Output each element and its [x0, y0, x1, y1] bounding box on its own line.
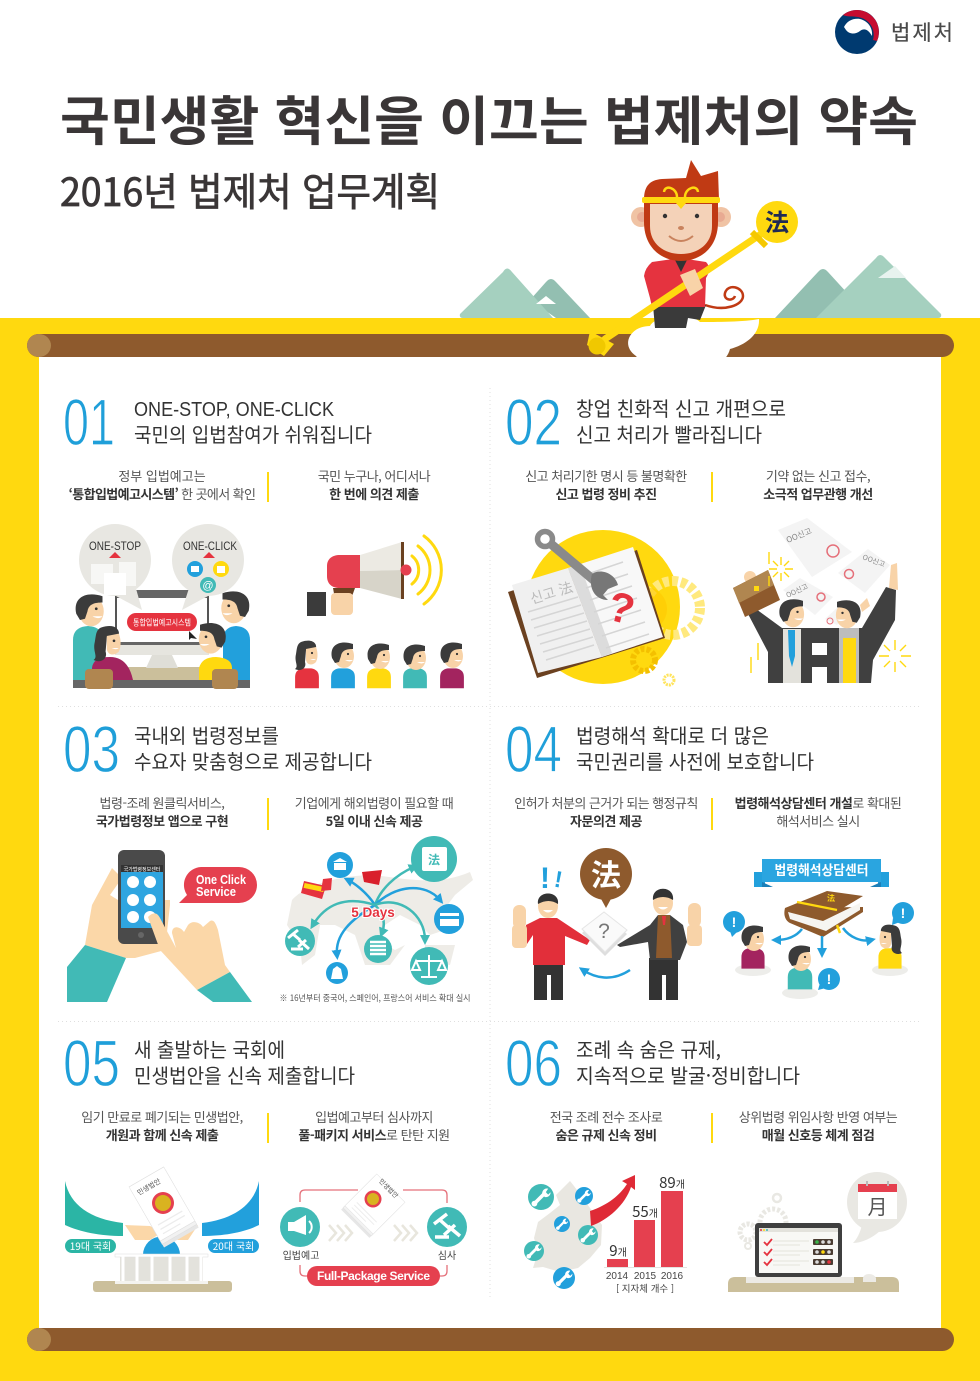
illustration: one-stop one-click [73, 524, 250, 689]
bar chart: 9개 [609, 1240, 627, 1261]
heading 04 [576, 720, 814, 775]
heading 01: ONE-STOP, ONE-CLICK [134, 399, 335, 421]
torso [644, 258, 709, 307]
law bubble: 法 [591, 851, 621, 895]
assembly building [93, 1237, 232, 1292]
hand [860, 563, 898, 612]
icon: gavel [285, 926, 315, 956]
text: right point [295, 793, 453, 830]
audience [295, 641, 464, 688]
text: left point [514, 793, 698, 830]
icon: law book [411, 836, 457, 882]
bar chart: [ 지자체 개수 ] [616, 1281, 674, 1295]
citizen [512, 894, 590, 1000]
exclamation marks [540, 862, 564, 895]
bar chart: 2016 [661, 1271, 684, 1282]
speech bubble: One Click [196, 873, 246, 887]
number 02: 02 [505, 385, 562, 459]
label: 19대 국회: 19대 국회 [70, 1238, 111, 1253]
gears [740, 1194, 786, 1249]
staff head [756, 201, 798, 243]
illustration: interpretation centre [723, 859, 914, 999]
legs [653, 305, 706, 328]
bubble: one-stop [79, 524, 151, 610]
text: right point [735, 793, 901, 830]
text: right point: 기약 없는 신고 접수, [766, 466, 870, 485]
text: left point [69, 466, 255, 503]
button [127, 613, 197, 640]
connector line [300, 1190, 447, 1276]
text: left point: 개원과 함께 신속 제출 [106, 1125, 219, 1144]
documents: OO신고 [785, 526, 813, 546]
heading 01: 국민의 입법참여가 쉬워집니다 [134, 419, 372, 448]
arrows [313, 867, 440, 955]
divider [267, 472, 269, 502]
heading 04: 국민권리를 사전에 보호합니다 [576, 746, 814, 775]
icon: card [434, 904, 464, 934]
speech bubble: Service [196, 885, 236, 899]
service pill: Full-Package Service [317, 1269, 430, 1283]
divider [711, 1113, 713, 1143]
question document [582, 912, 627, 956]
monkey character with staff on a cloud [587, 160, 798, 369]
panel 03 [63, 712, 473, 1004]
sleeve: teal [65, 1181, 123, 1236]
illustration: businessmen with papers [733, 518, 911, 683]
book: 신고 法 [528, 577, 575, 609]
yellow frame [0, 318, 980, 1381]
illustration: local regulation map and chart [524, 1172, 687, 1295]
number 06: 06 [505, 1026, 562, 1100]
official [617, 889, 702, 1000]
text: left point: 인허가 처분의 근거가 되는 행정규칙 [514, 793, 698, 812]
heading 03: 국내외 법령정보를 [134, 720, 279, 749]
staff head: 法 [765, 203, 789, 238]
law bubble [580, 848, 632, 908]
text: left point [81, 1107, 243, 1144]
logo: 법제처 [835, 10, 953, 54]
number 04: 04 [505, 712, 562, 786]
bottom wooden bar [27, 1328, 954, 1351]
text: right point: 입법예고부터 심사까지 [315, 1107, 433, 1126]
heading 02: 창업 친화적 신고 개편으로 [576, 393, 786, 422]
person: teal: ! [827, 971, 831, 987]
bubble: one-stop: ONE-STOP [89, 539, 141, 553]
text: left point: 국가법령정보 앱으로 구현 [96, 811, 228, 830]
book [508, 547, 665, 678]
bubble: one-click: ONE-CLICK [183, 539, 237, 553]
divider [267, 1113, 269, 1143]
person: yellow: ! [901, 905, 905, 921]
bar chart: 55개 [632, 1201, 658, 1222]
heading 06: 조례 속 숨은 규제, [576, 1034, 721, 1063]
monitor [115, 590, 209, 668]
hands [125, 1225, 198, 1240]
heading 04: 법령해석 확대로 더 많은 [576, 720, 769, 749]
person: plum [723, 911, 771, 976]
document stack: 민생법안 [377, 1176, 401, 1200]
document stack [129, 1167, 199, 1248]
divider [267, 798, 269, 830]
bubble: one-click [172, 524, 244, 610]
text: left point: 전국 조례 전수 조사로 [550, 1107, 663, 1126]
phone: 국가법령정보센터 [124, 866, 160, 873]
book [784, 891, 863, 937]
text: left point: 정부 입법예고는 [118, 466, 206, 485]
service pill [307, 1266, 440, 1286]
book: 法 [827, 893, 835, 904]
text: left point: 신고 법령 정비 추진 [555, 484, 657, 503]
heads [779, 599, 861, 628]
documents [778, 518, 890, 625]
divider [711, 798, 713, 830]
bar chart: 2014 [606, 1271, 629, 1282]
number 03: 03 [63, 712, 120, 786]
illustration: citizen and official [512, 848, 702, 1000]
icon: law book: 法 [428, 851, 440, 868]
sleeve: blue [202, 1181, 259, 1236]
heading 01 [134, 399, 372, 448]
text: left point: 숨은 규제 신속 정비 [555, 1125, 657, 1144]
question document: ? [598, 920, 610, 943]
phone [118, 850, 165, 944]
ears [631, 207, 731, 227]
text: left point [550, 1107, 663, 1144]
tail [705, 287, 743, 308]
divider [711, 472, 713, 502]
bar chart: 2015 [634, 1271, 657, 1282]
text: left point: 법령-조례 원클릭서비스, [100, 793, 224, 812]
headband [642, 188, 720, 209]
note: ※ 16년부터 중국어, 스페인어, 프랑스어 서비스 확대 실시 [280, 992, 470, 1004]
flags [301, 870, 382, 899]
laptop [755, 1223, 842, 1277]
banner: 법령해석상담센터 [774, 859, 868, 879]
panel 01 [63, 385, 464, 689]
illustration: laptop and calendar [728, 1172, 907, 1292]
labels [283, 1247, 456, 1262]
panel 04 [505, 712, 914, 1000]
heading 05: 민생법안을 신속 제출합니다 [134, 1060, 355, 1089]
bar chart [604, 1172, 687, 1295]
icon: court [327, 852, 353, 878]
icon: scales [410, 947, 448, 985]
heading 05: 새 출발하는 국회에 [134, 1034, 285, 1063]
text: right point: 국민 누구나, 어디서나 [318, 466, 431, 485]
person: yellow [872, 902, 914, 976]
icon: documents [364, 935, 392, 963]
text: left point [96, 793, 228, 830]
question mark: ? [603, 582, 640, 634]
illustration: phone in hands [67, 850, 257, 1002]
text: left point: 임기 만료로 폐기되는 민생법안, [81, 1107, 243, 1126]
top wooden bar [27, 334, 954, 357]
number 01: 01 [63, 385, 115, 459]
right hand and sleeve [148, 913, 252, 1002]
banner [754, 859, 889, 887]
sparkles [751, 552, 911, 673]
text: left point: 신고 처리기한 명시 등 불명확한 [525, 466, 687, 485]
wrench icons [524, 1184, 598, 1289]
illustration: megaphone with audience [295, 536, 464, 688]
mountains right [775, 255, 941, 318]
text: right point: 풀-패키지 서비스로 탄탄 지원 [298, 1125, 450, 1144]
text: right point [318, 466, 431, 503]
megaphone [307, 536, 441, 616]
label: 20대 국회: 20대 국회 [213, 1238, 254, 1253]
text: right point: 상위법령 위임사항 반영 여부는 [739, 1107, 898, 1126]
desk [728, 1274, 899, 1292]
icon: gavel [427, 1207, 467, 1247]
documents: OO신고 [784, 582, 810, 601]
panel 05 [63, 1026, 467, 1292]
heading 03 [134, 720, 372, 775]
bar chart: 89개 [659, 1172, 685, 1193]
suits [747, 587, 896, 683]
panel 02 [505, 385, 911, 685]
text: left point [525, 466, 687, 503]
text: right point: 법령해석상담센터 개설로 확대된 [735, 793, 901, 812]
heading 03: 수요자 맞춤형으로 제공합니다 [134, 746, 372, 775]
text: right point: 소극적 업무관행 개선 [763, 484, 873, 503]
label: 5 Days: 5 Days [351, 905, 395, 920]
growth arrow [590, 1175, 635, 1226]
text: right point [298, 1107, 450, 1144]
speech bubble [179, 867, 257, 903]
text: right point: 5일 이내 신속 제공 [326, 811, 423, 830]
document stack [341, 1174, 405, 1238]
section dividers [489, 388, 491, 1300]
text: left point: ‘통합입법예고시스템’ 한 곳에서 확인 [69, 484, 255, 503]
heading 06 [576, 1034, 800, 1089]
text: right point: 매월 신호등 체계 점검 [762, 1125, 874, 1144]
head [644, 160, 719, 261]
logo: 법제처: 법제처 [891, 17, 953, 47]
people group [73, 591, 250, 687]
documents: OO신고 [861, 552, 887, 570]
exclamation marks: ! [552, 866, 564, 893]
speech bubble with calendar: 月 [868, 1191, 888, 1220]
text: left point: 자문의견 제공 [570, 811, 642, 830]
panel 06 [505, 1026, 907, 1295]
heading 02: 신고 처리가 빨라집니다 [576, 419, 762, 448]
arrows [776, 928, 871, 953]
heading 02 [576, 393, 786, 448]
illustration: full-package service [280, 1174, 467, 1286]
person: plum: ! [732, 914, 736, 930]
chevrons [329, 1225, 417, 1241]
labels: 심사 [438, 1247, 456, 1262]
curved arrow [583, 970, 630, 978]
mountains left [460, 268, 590, 318]
exclamation marks: ! [540, 862, 550, 895]
map of Korea [533, 1181, 602, 1272]
illustration: book, wrench, gears [508, 530, 700, 685]
document stack: 민생법안 [135, 1176, 163, 1198]
button: 통합입법예고시스템 [133, 616, 191, 628]
text: right point [739, 1107, 898, 1144]
wrench [538, 532, 618, 600]
text: right point: 해석서비스 실시 [776, 811, 860, 830]
person: teal [782, 946, 840, 999]
icon: megaphone [280, 1207, 320, 1247]
icon: money bag [326, 962, 348, 984]
text: right point [763, 466, 873, 503]
heading 05 [134, 1034, 355, 1089]
title: 국민생활 혁신을 이끄는 법제처의 약속 [60, 80, 918, 156]
left hand and sleeve [67, 868, 170, 1002]
illustration: assembly hand-over [65, 1167, 259, 1292]
text: right point: 기업에게 해외법령이 필요할 때 [295, 793, 453, 812]
illustration: world map with arrows [280, 836, 473, 1004]
text: right point: 한 번에 의견 제출 [329, 484, 419, 503]
bubble: one-click: @ [202, 580, 214, 592]
heading 06: 지속적으로 발굴·정비합니다 [576, 1060, 800, 1089]
subtitle: 2016년 법제처 업무계획 [60, 162, 440, 218]
briefcase [733, 570, 780, 617]
hand [680, 269, 703, 296]
labels: 입법예고 [283, 1247, 319, 1262]
cloud [628, 316, 759, 369]
speech bubble with calendar [847, 1172, 907, 1243]
number 05: 05 [63, 1026, 120, 1100]
map [287, 872, 473, 965]
staff [587, 228, 770, 356]
